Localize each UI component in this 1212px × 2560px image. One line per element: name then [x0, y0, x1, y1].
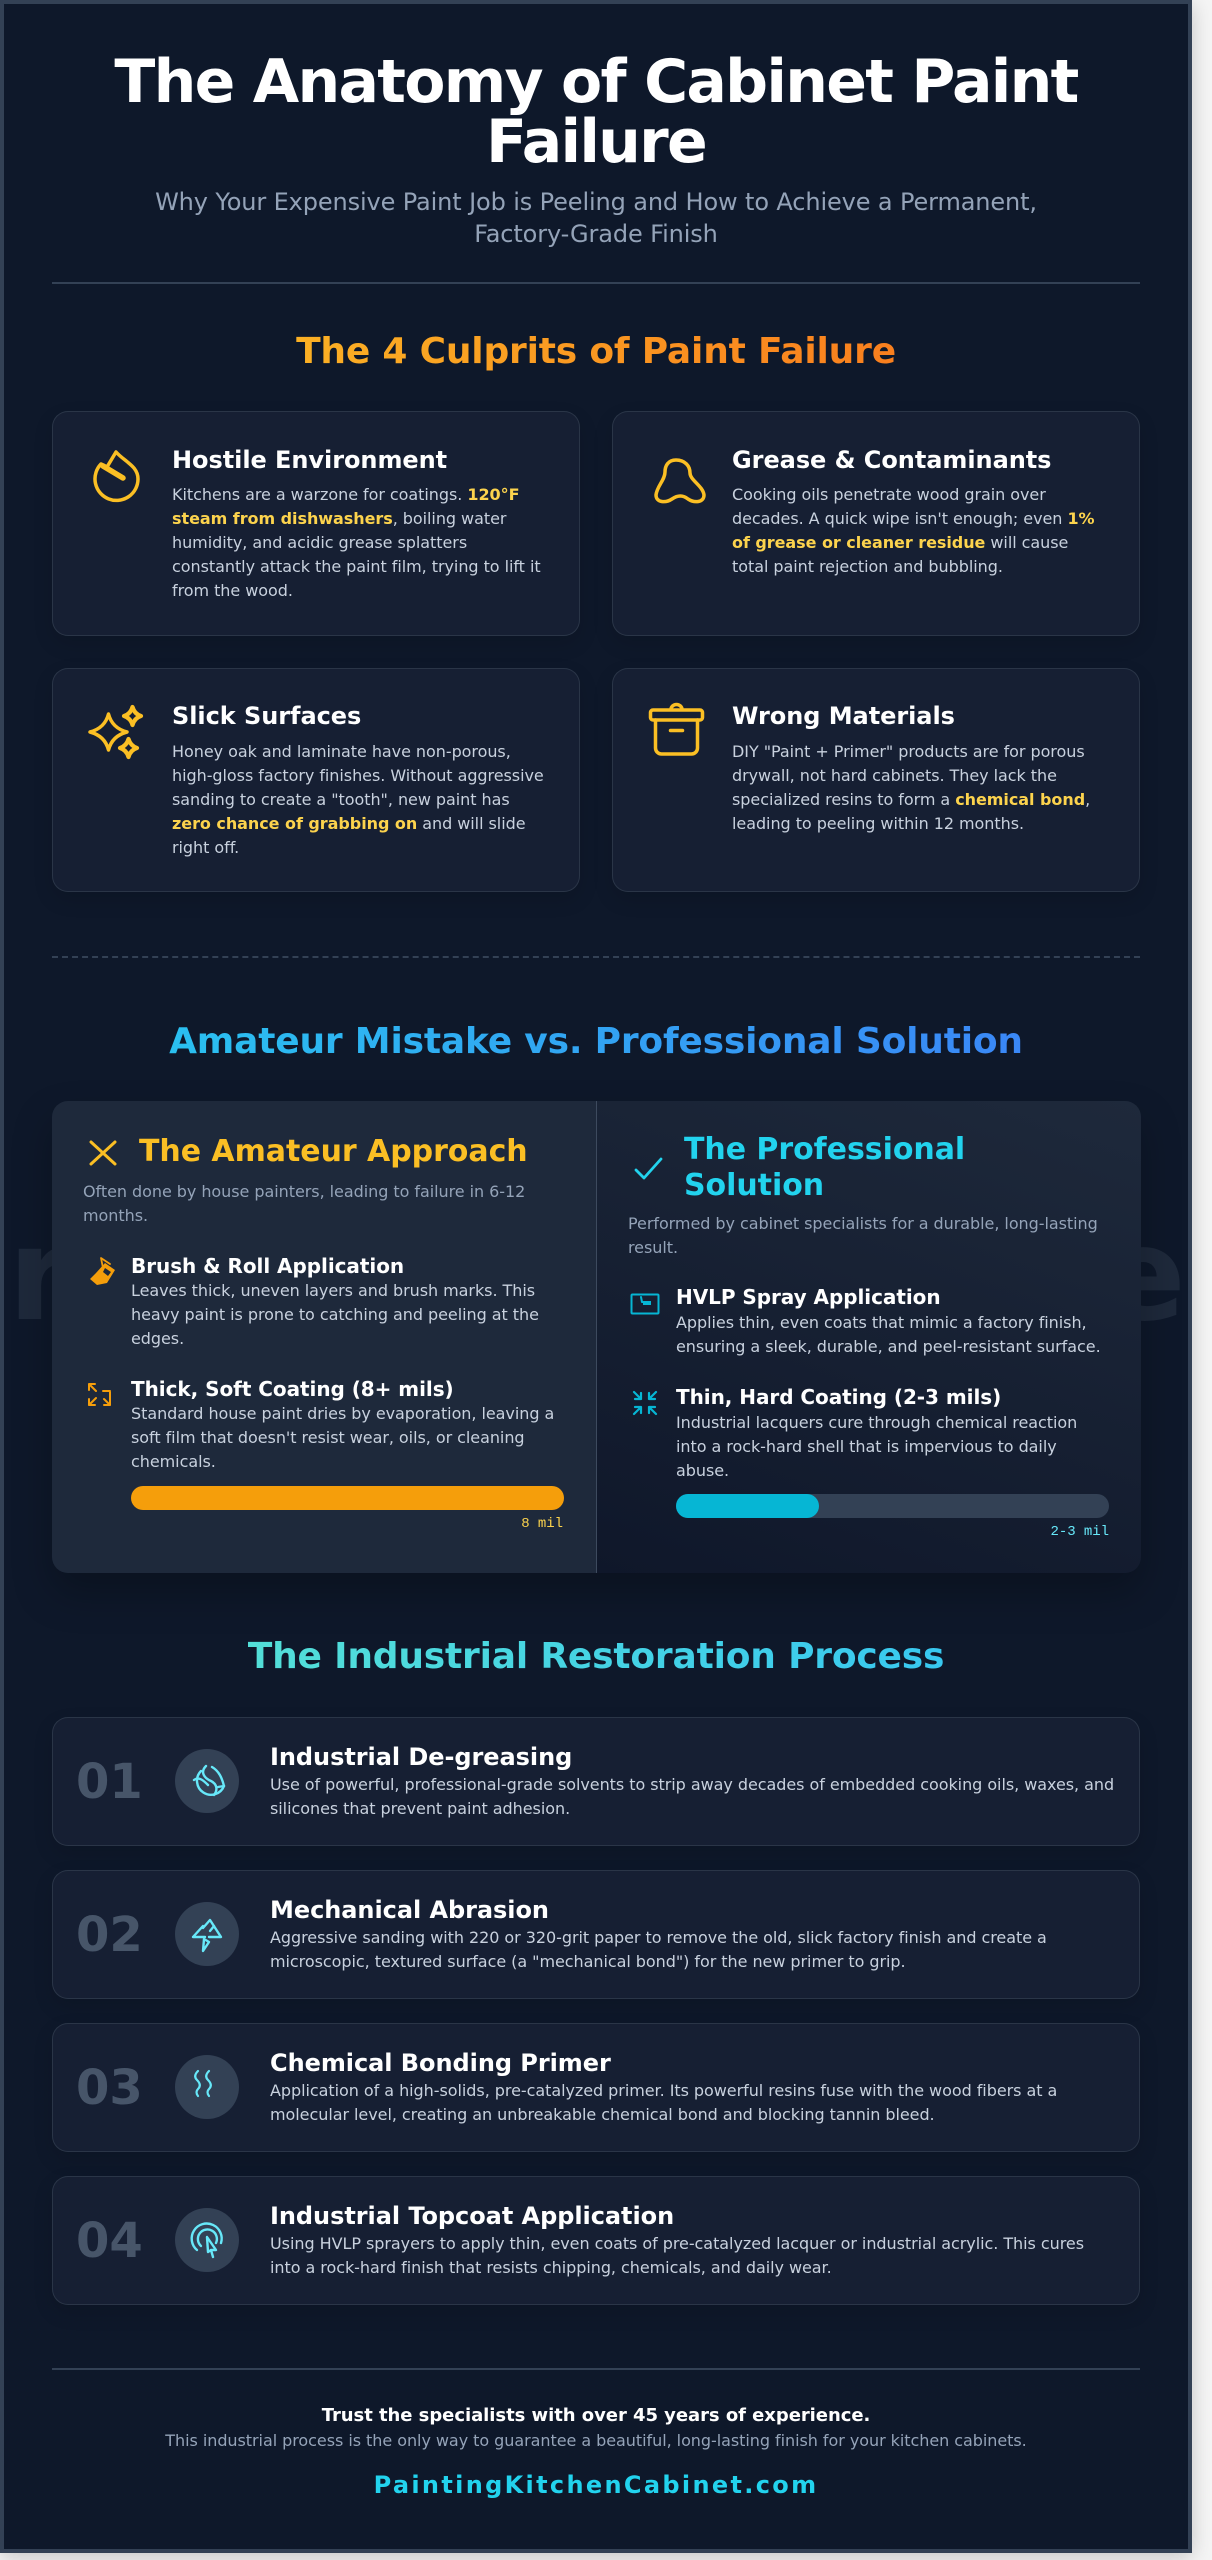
step text: molecular level, creating an unbreakable chemical bond and blocking tannin bleed. [270, 2105, 935, 2124]
panel: amateur approach [52, 1101, 597, 1573]
title: Failure [486, 107, 706, 177]
icon: chemical waves [175, 2055, 239, 2119]
step text [270, 2234, 1084, 2277]
icon: grease blob [654, 458, 706, 504]
panel heading: The Amateur Approach [139, 1134, 528, 1169]
step number: 01 [76, 1754, 143, 1810]
heading: culprits: The 4 Culprits of Paint Failure [296, 331, 896, 372]
panel heading [684, 1132, 965, 1203]
panel heading: The Professional [684, 1132, 965, 1167]
card text: specialized resins to form a chemical bond, [732, 790, 1090, 809]
panel intro: Often done by house painters, leading to failure in 6-12 [83, 1182, 525, 1201]
card text: DIY "Paint + Primer" products are for porous [732, 742, 1085, 761]
item text: heavy paint is prone to catching and peeling at the [131, 1305, 539, 1324]
footer note: This industrial process is the only way to guarantee a beautiful, long-lasting finish for your kitchen cabinets. [165, 2431, 1027, 2450]
card text: leading to peeling within 12 months. [732, 814, 1024, 833]
step number: 04 [76, 2213, 143, 2269]
icon: check [634, 1158, 662, 1180]
heading: process: The Industrial Restoration Process [248, 1636, 944, 1677]
card text: drywall, not hard cabinets. They lack the [732, 766, 1057, 785]
card text: high-gloss factory finishes. Without aggressive [172, 766, 544, 785]
item text [131, 1404, 554, 1471]
step text: Use of powerful, professional-grade solvents to strip away decades of embedded cooking oils, waxes, and [270, 1775, 1114, 1794]
item text [131, 1281, 539, 1348]
card title: Grease & Contaminants [732, 446, 1051, 474]
step text [270, 1775, 1114, 1818]
icon: sparkles [88, 704, 144, 760]
thickness bar: 8 mil [131, 1486, 564, 1510]
step 2: abrasion [52, 1870, 1140, 1999]
card title: Wrong Materials [732, 702, 955, 730]
card text: Cooking oils penetrate wood grain over [732, 485, 1046, 504]
card text: from the wood. [172, 581, 293, 600]
step text: microscopic, textured surface (a "mechanical bond") for the new primer to grip. [270, 1952, 906, 1971]
panel intro [628, 1214, 1098, 1257]
thickness bar: 2-3 mil [676, 1494, 1109, 1518]
panel intro: Performed by cabinet specialists for a durable, long-lasting [628, 1214, 1098, 1233]
background watermark letters: e [1099, 1201, 1186, 1350]
icon: solvent swirl [175, 1749, 239, 1813]
card text: Honey oak and laminate have non-porous, [172, 742, 511, 761]
subtitle [155, 188, 1037, 248]
item title: Brush & Roll Application [131, 1254, 404, 1278]
step number: 03 [76, 2060, 143, 2116]
footer website: PaintingKitchenCabinet.com [374, 2471, 818, 2499]
step title: Chemical Bonding Primer [270, 2049, 611, 2077]
item text: Leaves thick, uneven layers and brush marks. This [131, 1281, 535, 1300]
item title: Thin, Hard Coating (2-3 mils) [676, 1385, 1001, 1409]
card text: decades. A quick wipe isn't enough; even 1% [732, 509, 1095, 528]
step text: silicones that prevent paint adhesion. [270, 1799, 570, 1818]
item text: ensuring a sleek, durable, and peel-resistant surface. [676, 1337, 1101, 1356]
item title: HVLP Spray Application [676, 1285, 941, 1309]
icon: flame [93, 450, 140, 502]
panel: grease and contaminants [612, 411, 1140, 636]
subtitle: Why Your Expensive Paint Job is Peeling and How to Achieve a Permanent, [155, 188, 1037, 216]
icon: expand arrows [88, 1383, 111, 1406]
card text: total paint rejection and bubbling. [732, 557, 1003, 576]
panel: professional solution [597, 1101, 1141, 1573]
item text: abuse. [676, 1461, 729, 1480]
card text [172, 742, 544, 857]
title: The Anatomy of Cabinet Paint [114, 47, 1078, 117]
step 1: de-greasing [52, 1717, 1140, 1846]
card text: sanding to create a "tooth", new paint has [172, 790, 510, 809]
background watermark letters [8, 1201, 1186, 1350]
card text: of grease or cleaner residue will cause [732, 533, 1068, 552]
step text: Using HVLP sprayers to apply thin, even coats of pre-catalyzed lacquer or industrial acrylic. This cures [270, 2234, 1084, 2253]
item: hvlp spray [630, 1285, 1101, 1356]
card text: constantly attack the paint film, trying to lift it [172, 557, 541, 576]
icon: abrasion spark [175, 1902, 239, 1966]
card title: Hostile Environment [172, 446, 447, 474]
step text: into a rock-hard finish that resists chipping, chemicals, and daily wear. [270, 2258, 832, 2277]
card text [172, 485, 541, 600]
card text [732, 485, 1095, 576]
card text [732, 742, 1090, 833]
panel: slick surfaces [52, 668, 580, 892]
step title: Industrial De-greasing [270, 1743, 572, 1771]
item title: Thick, Soft Coating (8+ mils) [131, 1377, 454, 1401]
step text: Aggressive sanding with 220 or 320-grit paper to remove the old, slick factory finish and create a [270, 1928, 1047, 1947]
step title: Industrial Topcoat Application [270, 2202, 674, 2230]
card text: steam from dishwashers, boiling water [172, 509, 506, 528]
icon: paint pour [90, 1257, 115, 1285]
item text: Industrial lacquers cure through chemical reaction [676, 1413, 1077, 1432]
item: brush and roll [90, 1254, 539, 1348]
item: thick coating [88, 1377, 564, 1532]
step text: Application of a high-solids, pre-catalyzed primer. Its powerful resins fuse with the wood fibers at a [270, 2081, 1057, 2100]
panel intro [83, 1182, 525, 1225]
icon: spray booth [630, 1294, 660, 1314]
icon: cross [89, 1140, 117, 1166]
card text: right off. [172, 838, 239, 857]
step number: 02 [76, 1907, 143, 1963]
panel: wrong materials [612, 668, 1140, 892]
card text: Kitchens are a warzone for coatings. 120°F [172, 485, 519, 504]
step text [270, 2081, 1057, 2124]
item text: into a rock-hard shell that is impervious to daily [676, 1437, 1057, 1456]
heading: comparison: Amateur Mistake vs. Professional Solution [169, 1021, 1023, 1062]
bar label: 8 mil [521, 1516, 563, 1532]
item text: chemicals. [131, 1452, 216, 1471]
panel heading: Solution [684, 1168, 824, 1203]
subtitle: Factory-Grade Finish [474, 220, 718, 248]
footer trust line: Trust the specialists with over 45 years of experience. [322, 2405, 870, 2426]
card text: zero chance of grabbing on and will slide [172, 814, 526, 833]
item text: soft film that doesn't resist wear, oils, or cleaning [131, 1428, 525, 1447]
item text: Standard house paint dries by evaporation, leaving a [131, 1404, 554, 1423]
item text [676, 1413, 1077, 1480]
icon: paint bucket [648, 702, 704, 756]
step title: Mechanical Abrasion [270, 1896, 549, 1924]
item text [676, 1313, 1101, 1356]
item text: edges. [131, 1329, 184, 1348]
panel intro: result. [628, 1238, 678, 1257]
step 3: primer [52, 2023, 1140, 2152]
title [114, 47, 1078, 177]
item: thin coating [632, 1385, 1109, 1540]
card title: Slick Surfaces [172, 702, 361, 730]
card text: humidity, and acidic grease splatters [172, 533, 467, 552]
comparison panel [52, 1101, 1141, 1573]
panel intro: months. [83, 1206, 148, 1225]
step 4: topcoat [52, 2176, 1140, 2305]
icon: compress arrows [632, 1390, 658, 1416]
panel: hostile environment [52, 411, 580, 636]
bar label: 2-3 mil [1051, 1524, 1109, 1540]
background watermark letters: r [8, 1201, 71, 1350]
icon: spray cursor [175, 2208, 239, 2272]
item text: Applies thin, even coats that mimic a factory finish, [676, 1313, 1087, 1332]
step text [270, 1928, 1047, 1971]
